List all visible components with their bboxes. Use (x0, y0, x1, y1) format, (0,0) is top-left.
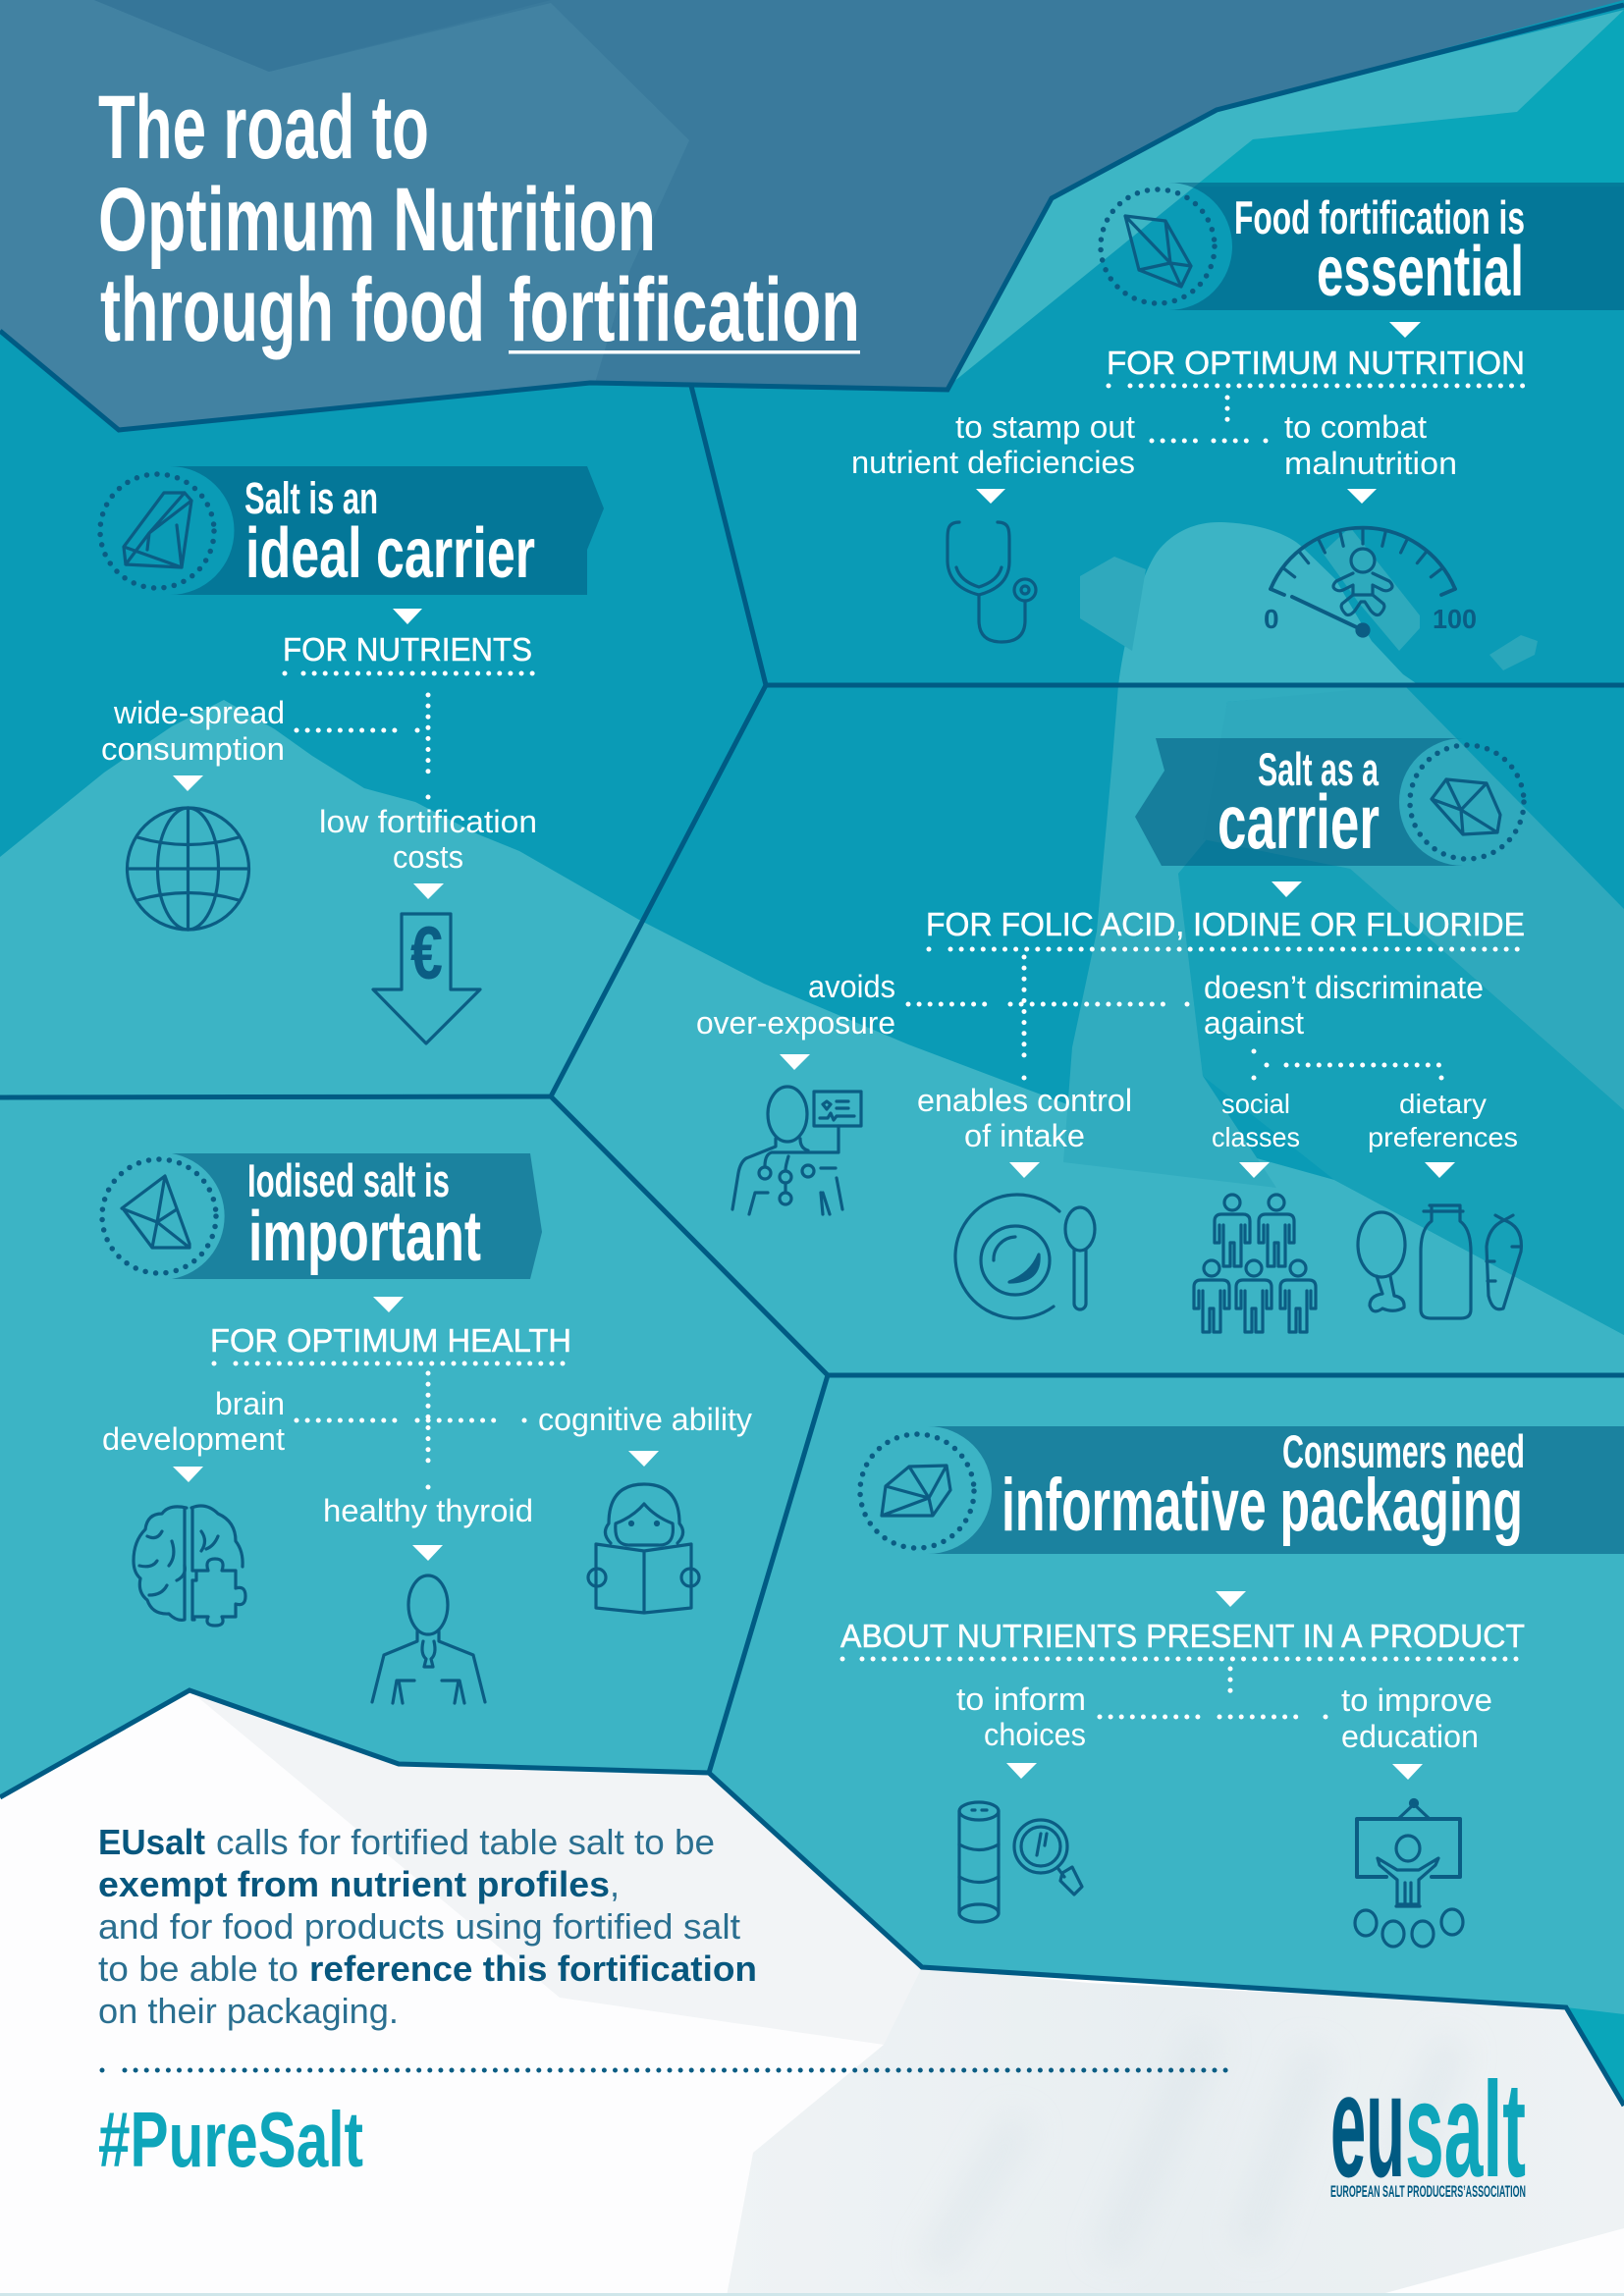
labels: brain (215, 1386, 285, 1421)
panel: salt as a carrier: classes (1212, 1122, 1300, 1152)
subheading: FOR OPTIMUM HEALTH (210, 1322, 571, 1359)
heading: Salt is an (244, 473, 378, 523)
panel: salt as a carrier: against (1204, 1005, 1304, 1041)
icon: salt can and magnifier (959, 1802, 1082, 1922)
panel: consumers need informative packaging: to improve (1341, 1682, 1492, 1718)
arrow (1239, 1162, 1270, 1178)
background: lower right teal (1178, 839, 1624, 1335)
background: conveyor belt (1203, 685, 1624, 1110)
arrow (1006, 1763, 1037, 1779)
panel: iodised salt is important: important (248, 1198, 481, 1276)
panel: consumers need informative packaging: education (1341, 1719, 1479, 1754)
icon: thyroid person (372, 1575, 485, 1703)
panel: salt as a carrier (696, 738, 1525, 1332)
heading: Iodised salt is (247, 1154, 450, 1206)
icon: chicken, milk and carrot (1358, 1205, 1521, 1318)
background: falling salt stream (1063, 685, 1404, 1188)
panel: salt is an ideal carrier (100, 466, 604, 1043)
bottom white panel (0, 1690, 1624, 2296)
panel: salt as a carrier: carrier (1218, 778, 1380, 865)
arrow (1389, 322, 1421, 338)
panel: salt as a carrier: enables control (917, 1083, 1132, 1118)
arrow (780, 1054, 810, 1070)
icon: plate and spoon (955, 1195, 1095, 1318)
panel: salt as a carrier: doesn’t discriminate (1204, 970, 1484, 1005)
hashtag: #PureSalt (98, 2096, 363, 2183)
title: through food (100, 260, 485, 360)
arrow (393, 609, 422, 624)
text block: EUsalt call: reference this fortification (309, 1949, 757, 1989)
title: Optimum Nutrition (98, 170, 656, 270)
panel: food fortification is essential (851, 183, 1624, 642)
icon: crystal (860, 1434, 974, 1548)
text block: EUsalt call: , (610, 1864, 620, 1904)
arrow (373, 1297, 404, 1312)
arrow (1347, 489, 1377, 504)
icon: crystal (1410, 745, 1524, 859)
icon: teacher and audience (1355, 1800, 1463, 1947)
text block: EUsalt call (98, 1822, 757, 2031)
banner (172, 1153, 542, 1279)
arrow (628, 1451, 659, 1467)
panel: salt as a carrier: dietary (1399, 1089, 1487, 1119)
arrow (173, 775, 203, 791)
panel: salt as a carrier: of intake (964, 1118, 1085, 1153)
arrow (413, 883, 444, 899)
subheading: FOR FOLIC ACID, IODINE OR FLUORIDE (926, 906, 1525, 942)
top right corner facet (947, 0, 1624, 388)
title (98, 78, 860, 360)
labels: wide-spread (113, 695, 285, 730)
text block: EUsalt call: on their packaging. (98, 1991, 399, 2031)
arrow (1272, 881, 1302, 897)
arrow (976, 489, 1005, 504)
panel: iodised salt is important: development (102, 1421, 285, 1457)
banner (928, 1426, 1624, 1554)
panel: iodised salt is important: cognitive ability (538, 1402, 752, 1437)
icon: crystal (1101, 189, 1215, 303)
background: machine parts (1080, 527, 1538, 670)
labels: avoids (808, 969, 895, 1004)
icon: globe (128, 808, 249, 930)
subheading: ABOUT NUTRIENTS PRESENT IN A PRODUCT (840, 1618, 1525, 1654)
icon: crystal (102, 1159, 216, 1273)
arrow (1009, 1162, 1040, 1178)
labels: low fortification (319, 804, 537, 839)
panel: food fortification is essential: nutrient deficiencies (851, 445, 1135, 480)
subheading: FOR OPTIMUM NUTRITION (1107, 345, 1525, 381)
text block: EUsalt call: EUsalt (98, 1822, 205, 1862)
text block: EUsalt call: and for food products using fortified salt (98, 1906, 740, 1947)
heading: Salt as a (1258, 743, 1380, 795)
panel: consumers need informative packaging: choices (984, 1717, 1086, 1752)
panel: iodised salt is important: healthy thyroid (323, 1493, 533, 1528)
labels: to inform (956, 1682, 1086, 1717)
arrow (412, 1545, 443, 1561)
panel: consumers need informative packaging (840, 1425, 1624, 1947)
logo: eusalt: eu (1330, 2043, 1405, 2208)
icon: baby gauge: 100 (1433, 604, 1477, 634)
labels: to stamp out (955, 409, 1135, 445)
title: fortification (509, 260, 860, 360)
title panel background (0, 0, 1624, 430)
bottom right teal corner (1566, 2007, 1624, 2106)
arrow (1216, 1591, 1246, 1607)
icon: girl reading book (588, 1484, 699, 1613)
icon: crystal (100, 474, 214, 588)
icon: stethoscope (947, 522, 1036, 642)
panel: salt is an ideal carrier: ideal carrier (245, 514, 535, 593)
arrow (1425, 1162, 1455, 1178)
panel: food fortification is essential: to combat (1284, 409, 1427, 445)
panel: salt as a carrier: over-exposure (696, 1005, 895, 1041)
banner (170, 466, 604, 595)
panel: food fortification is essential: essential (1317, 233, 1524, 311)
icon: euro down arrow: € (410, 912, 443, 995)
panel: food fortification is essential: malnutrition (1284, 446, 1457, 481)
background: salt pile (0, 700, 1624, 2296)
panel: iodised salt is important (102, 1153, 752, 1703)
text block: EUsalt call: to be able to (98, 1949, 298, 1989)
dotted divider (102, 2067, 1232, 2073)
icon: euro down arrow (373, 912, 480, 1043)
text block: EUsalt call: exempt from nutrient profiles (98, 1864, 610, 1904)
banner (1135, 738, 1463, 866)
icon: patient with monitor (732, 1087, 861, 1214)
panel: salt is an ideal carrier: costs (393, 839, 463, 875)
icon: baby gauge: 0 (1264, 604, 1279, 634)
icon: brain and puzzle piece (134, 1506, 245, 1626)
panel: salt as a carrier: preferences (1368, 1122, 1518, 1152)
background: salt dome (1118, 522, 1419, 685)
subheading: FOR NUTRIENTS (283, 631, 532, 667)
panel: salt is an ideal carrier: consumption (101, 731, 285, 767)
panel: salt as a carrier: social (1221, 1089, 1290, 1119)
banner (1168, 183, 1624, 310)
arrow (173, 1467, 203, 1482)
icon: social classes group (1194, 1195, 1316, 1332)
icon: baby gauge (1264, 528, 1477, 636)
arrow (1392, 1764, 1423, 1780)
title: The road to (98, 78, 429, 178)
text block: EUsalt call: calls for fortified table salt to be (216, 1822, 715, 1862)
